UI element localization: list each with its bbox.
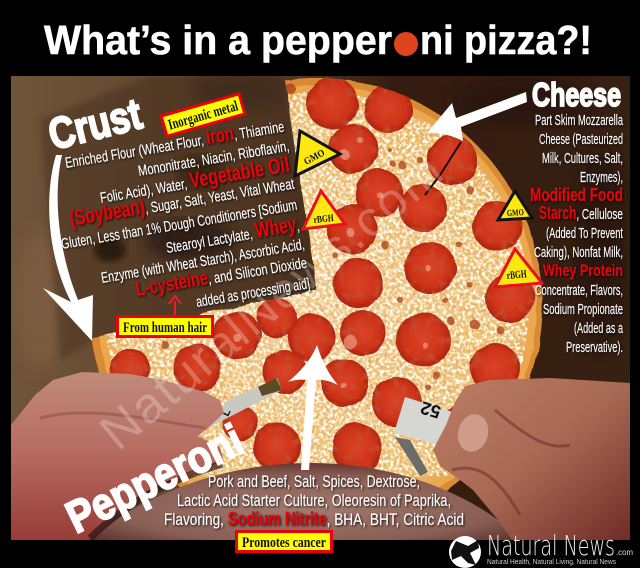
crust ingredients text: Enriched Flour (Wheat Flour, Iron, Thiamine: [63, 115, 286, 173]
arrow: hair to L-cysteine: [169, 296, 181, 317]
logo: Natural News: .com: [616, 548, 633, 557]
crust ingredients text: L-cysteine, and Silicon Dioxide: [134, 251, 308, 301]
icon: rBGH warning cheese: [495, 249, 542, 287]
belly: [88, 463, 522, 540]
crust ingredients text: Stearoyl Lactylate, Whey,: [164, 211, 301, 258]
pizza slice cut line: [425, 142, 461, 195]
label: inorganic metal: Inorganic metal: [166, 98, 240, 134]
icon: rBGH warning cheese: rBGH: [506, 268, 527, 282]
pepperoni ingredients text: Lactic Acid Starter Culture, Oleoresin of Paprika,: [177, 491, 451, 510]
title: [44, 17, 592, 63]
icon: rBGH warning crust: [303, 191, 345, 229]
label: promotes cancer: [236, 532, 332, 552]
crust ingredients text: Enzyme (with Wheat Starch), Ascorbic Acid,: [100, 236, 306, 287]
pizza: [92, 78, 543, 491]
hand shadow along belly: [90, 464, 222, 538]
arrow: cheese: [427, 92, 527, 141]
tape left: L: [220, 407, 234, 418]
arrow: pepperoni: [288, 345, 338, 470]
icon: rBGH warning crust: rBGH: [313, 213, 334, 226]
crust ingredients text: Mononitrate, Niacin, Riboflavin,: [137, 138, 291, 180]
hand left: [11, 372, 224, 540]
label: promotes cancer: Promotes cancer: [242, 535, 326, 551]
logo: Natural News: Natural Health, Natural Living, Natural News: [487, 559, 616, 566]
heading: crust: Crust: [44, 89, 147, 160]
thumbnail: [454, 411, 492, 455]
crust ingredients text: Gluten, Less than 1% Dough Conditioners [Sodium: [60, 197, 298, 253]
heading: pepperoni: Pepperoni: [58, 414, 251, 543]
icon: globe: [449, 536, 481, 568]
crust ingredients text: (Soybean), Sugar, Salt, Yeast, Vital Wheat: [68, 169, 296, 231]
arrow: crust: [43, 155, 93, 341]
finger crease: [40, 413, 205, 428]
cheese ingredients text: [530, 112, 624, 356]
pepperoni ingredients text: Pork and Beef, Salt, Spices, Dextrose,: [208, 472, 420, 491]
watermark: NaturalNews.com: [89, 141, 454, 460]
finger crease: [452, 410, 570, 515]
label: from human hair: From human hair: [123, 320, 207, 336]
crust ingredients text: added as processing aid]: [195, 275, 311, 311]
icon: GMO warning cheese: [498, 191, 532, 220]
icon: GMO warning cheese: GMO: [507, 207, 524, 218]
tape right: [394, 397, 456, 476]
title: ni pizza?!: [420, 17, 592, 63]
pepperoni highlights: [233, 137, 431, 388]
pepperoni slices: [110, 77, 535, 473]
label: from human hair: [118, 316, 212, 336]
crust ingredients text: [60, 115, 311, 311]
icon: GMO warning crust: [295, 131, 340, 176]
pepperoni ingredients text: Flavoring, Sodium Nitrite, BHA, BHT, Citric Acid: [164, 509, 464, 529]
label: inorganic metal: [161, 94, 245, 136]
slice shadow panel: [40, 76, 317, 360]
pepperoni ingredients text: [164, 472, 464, 529]
title: What’s in a pepper: [44, 17, 392, 63]
logo: Natural News: [449, 529, 633, 568]
cheese spots: [161, 83, 504, 390]
icon: GMO warning crust: GMO: [302, 148, 327, 168]
tape right: 52: [418, 397, 443, 422]
tape left: [208, 378, 282, 428]
crust ingredients text: Folic Acid), Water, Vegetable Oil: [98, 152, 291, 208]
hand right: [433, 378, 630, 540]
